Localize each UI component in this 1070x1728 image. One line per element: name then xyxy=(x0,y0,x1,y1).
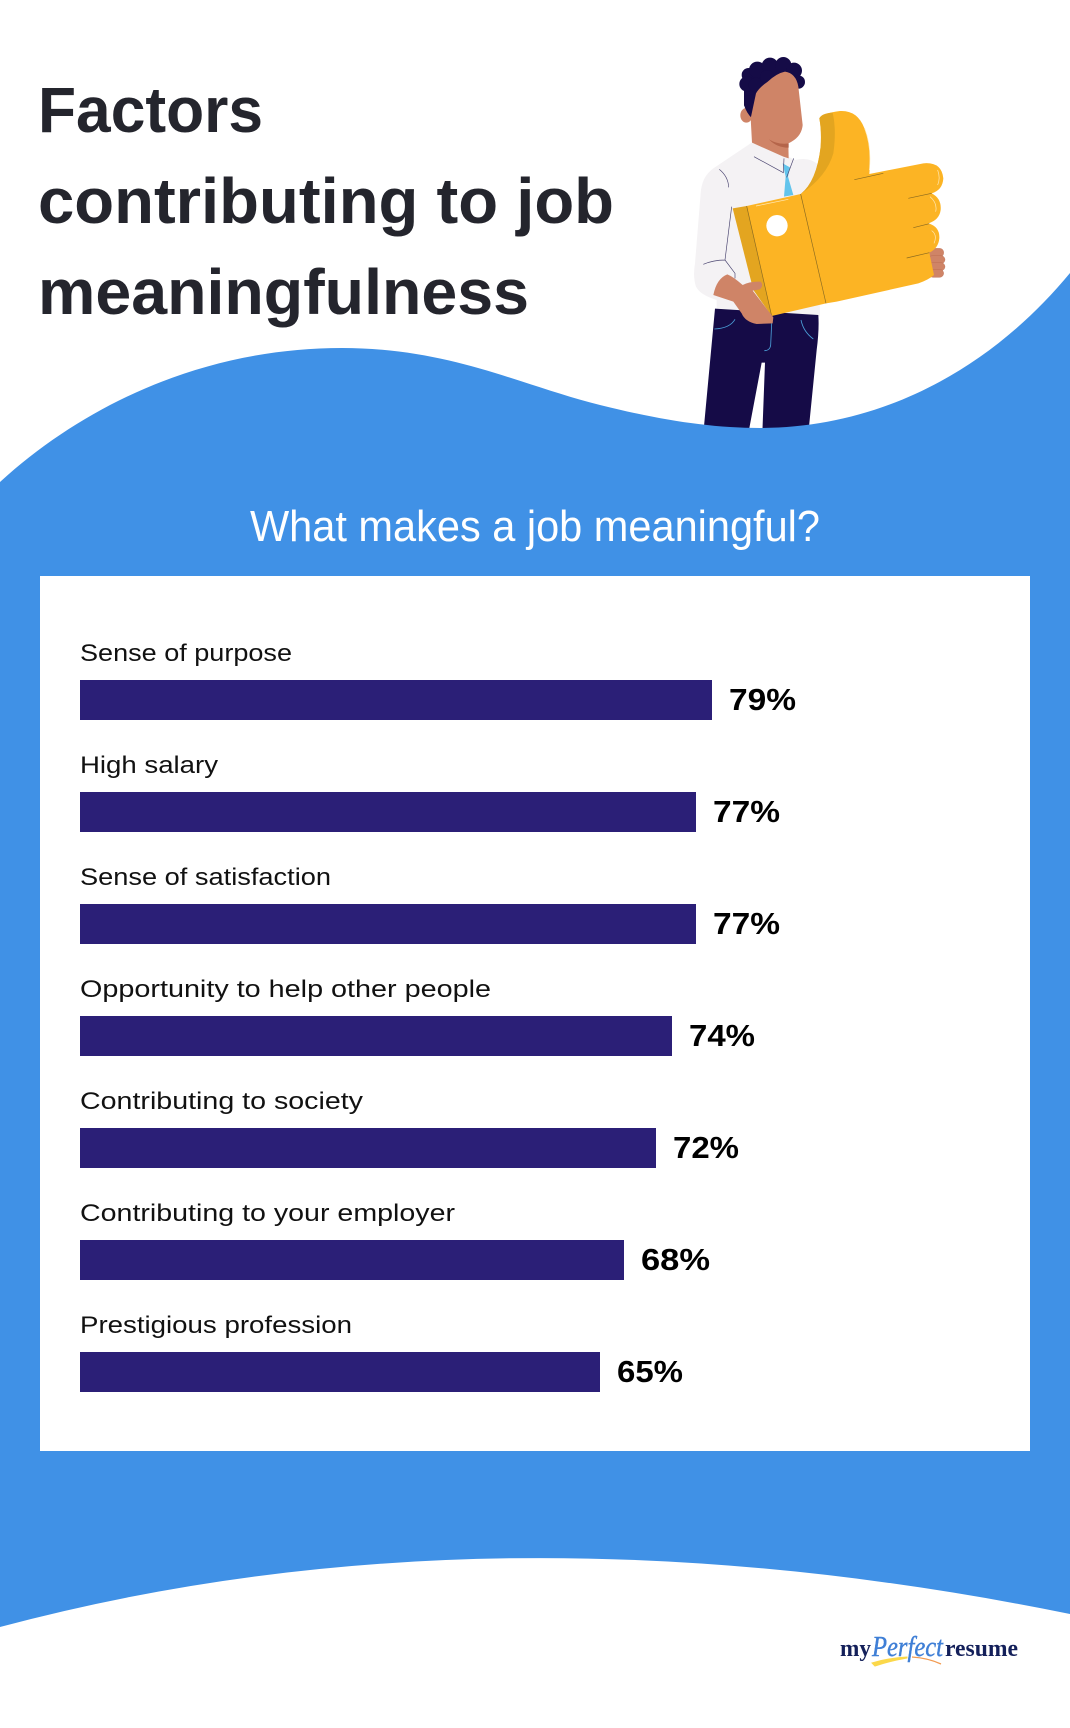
right hand fingers xyxy=(928,248,945,277)
row: prestigious profession: Prestigious profession xyxy=(80,1312,352,1339)
row: contributing to society xyxy=(80,1088,739,1168)
row: sense of purpose: Sense of purpose xyxy=(80,640,292,667)
title: contributing to job xyxy=(38,165,614,237)
row: opportunity to help other people: 74% xyxy=(689,1018,755,1053)
logo: myPerfectResume xyxy=(840,1632,1018,1666)
row: sense of purpose xyxy=(80,640,796,720)
row: contributing to society: Contributing to society xyxy=(80,1088,363,1115)
trousers xyxy=(703,309,819,433)
row: opportunity to help other people: Opportunity to help other people xyxy=(80,976,491,1003)
title: Factors xyxy=(38,74,263,146)
row: contributing to society: 72% xyxy=(673,1130,739,1165)
cuff button xyxy=(766,215,788,236)
row: sense of satisfaction: 77% xyxy=(713,906,780,941)
shirt xyxy=(694,143,820,317)
logo: myPerfectResume: my xyxy=(840,1636,871,1662)
chart heading: What makes a job meaningful? xyxy=(250,502,820,551)
row: sense of purpose: 79% xyxy=(729,682,796,717)
row: sense of satisfaction xyxy=(80,864,780,944)
hair xyxy=(739,57,805,118)
title xyxy=(38,74,614,328)
left hand xyxy=(713,274,773,324)
tie xyxy=(783,163,793,197)
blue background wave xyxy=(0,273,1070,1627)
cuff xyxy=(747,194,826,316)
row: contributing to your employer: Contributing to your employer xyxy=(80,1200,455,1227)
row: prestigious profession: 65% xyxy=(617,1354,683,1389)
row: prestigious profession xyxy=(80,1312,683,1392)
row: contributing to your employer xyxy=(80,1200,710,1280)
panel: bar chart xyxy=(40,576,1030,1451)
row: high salary: 77% xyxy=(713,794,780,829)
row: high salary: High salary xyxy=(80,752,218,779)
row: high salary xyxy=(80,752,780,832)
row: contributing to your employer: 68% xyxy=(641,1242,710,1277)
logo: myPerfectResume: resume xyxy=(945,1636,1018,1662)
row: opportunity to help other people xyxy=(80,976,755,1056)
thumb-up hand xyxy=(801,111,943,303)
ear xyxy=(740,108,752,123)
title: meaningfulness xyxy=(38,256,529,328)
row: sense of satisfaction: Sense of satisfaction xyxy=(80,864,331,891)
illustration: man holding thumbs-up xyxy=(694,57,945,433)
face and neck xyxy=(751,72,803,158)
logo: myPerfectResume: Perfect xyxy=(871,1632,944,1663)
